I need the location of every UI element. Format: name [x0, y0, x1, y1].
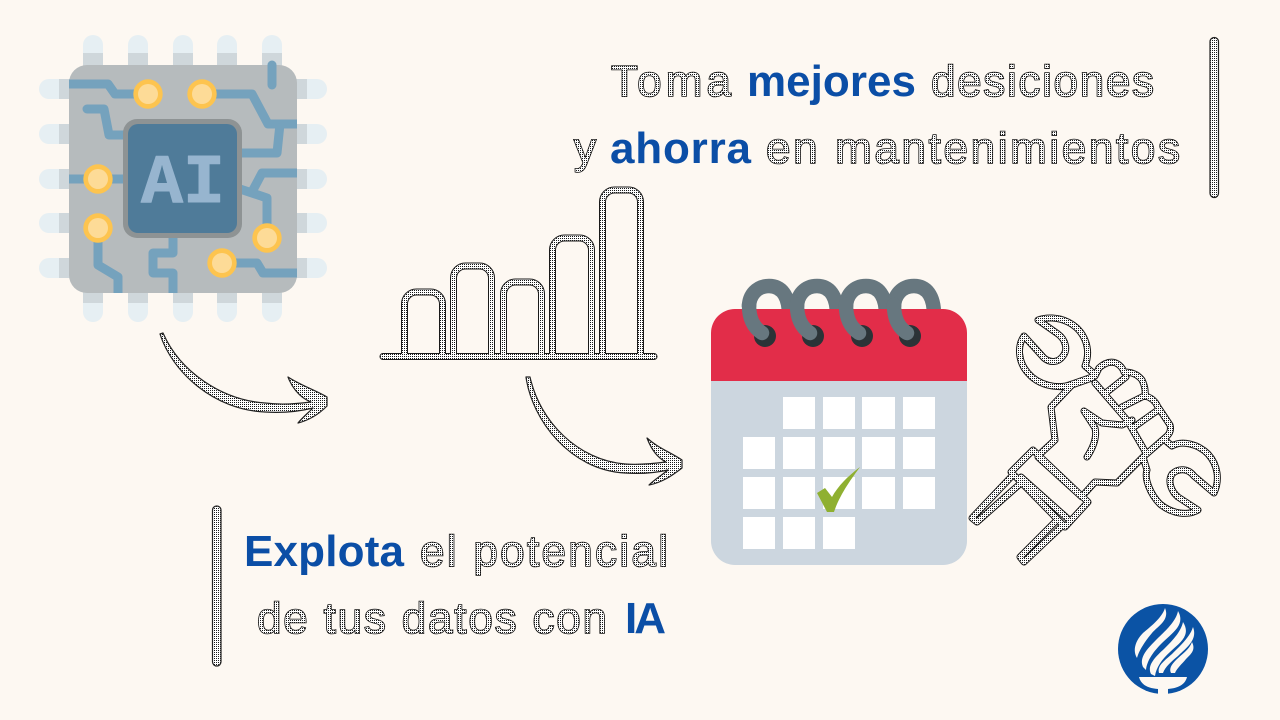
icon: AI chip [39, 35, 327, 322]
chip core [123, 119, 242, 238]
calendar holes [754, 325, 921, 347]
calendar page [711, 381, 967, 565]
chip label: AI [141, 145, 225, 224]
chip body [69, 65, 297, 293]
text block: bottom left: el potencial [420, 527, 668, 576]
arrow: chip to chart [160, 333, 327, 423]
icon: fist holding wrench [972, 318, 1217, 562]
chip nodes [83, 79, 282, 278]
calendar days [743, 397, 935, 549]
accent bar: top right [1210, 38, 1218, 198]
circuit traces [69, 65, 297, 293]
heading: top right: y [574, 124, 596, 173]
text block: bottom left [244, 527, 668, 643]
heading: top right [574, 57, 1180, 173]
text block: bottom left: Explota [244, 527, 405, 576]
calendar rings, front half [749, 305, 907, 333]
text block: bottom left: IA [625, 594, 666, 643]
text block: bottom left: de tus datos con [257, 594, 607, 643]
arrow: chart to calendar [526, 377, 682, 485]
icon: check mark [817, 467, 860, 512]
bar chart [383, 190, 654, 356]
logo flames [1135, 608, 1194, 694]
heading: top right: ahorra [610, 124, 752, 173]
calendar rings, back half [749, 286, 934, 315]
logo [1118, 604, 1208, 694]
calendar header [711, 309, 967, 381]
chip pins [39, 35, 327, 322]
heading: top right: Toma [611, 57, 732, 106]
heading: top right: mejores [747, 57, 916, 106]
icon: calendar [711, 286, 967, 565]
accent bar: bottom left [212, 506, 221, 666]
heading: top right: en mantenimientos [766, 124, 1180, 173]
heading: top right: desiciones [931, 57, 1154, 106]
